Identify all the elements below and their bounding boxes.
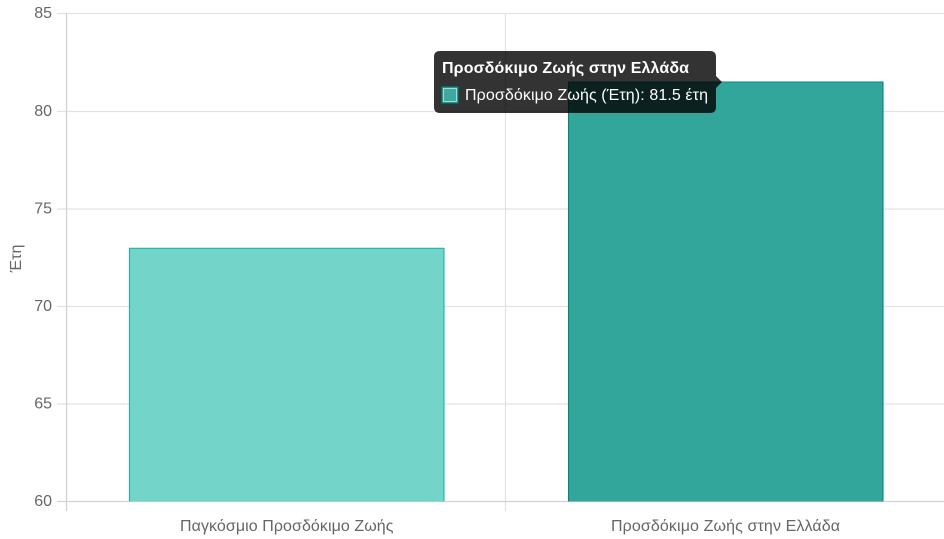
tooltip title: Προσδόκιμο Ζωής στην Ελλάδα	[442, 60, 689, 77]
y axis tick labels: 70	[34, 298, 52, 315]
tooltip value: Προσδόκιμο Ζωής (Έτη): 81.5 έτη	[465, 87, 708, 104]
x axis labels: Παγκόσμιο Προσδόκιμο Ζωής	[180, 518, 394, 535]
y axis title: Έτη	[8, 245, 25, 273]
x axis labels	[180, 518, 840, 535]
y axis tick labels: 75	[34, 200, 52, 218]
y axis tick labels: 65	[34, 396, 52, 412]
y axis tick labels: 60	[34, 493, 52, 510]
x axis labels: Προσδόκιμο Ζωής στην Ελλάδα	[611, 518, 840, 535]
tooltip colour swatch	[442, 87, 458, 103]
y axis tick labels	[34, 5, 52, 510]
y axis tick labels: 85	[34, 5, 52, 22]
bar: world life expectancy	[129, 248, 444, 502]
tooltip	[434, 51, 722, 113]
y axis tick labels: 80	[34, 103, 52, 120]
bar: life expectancy in Greece	[568, 82, 883, 502]
